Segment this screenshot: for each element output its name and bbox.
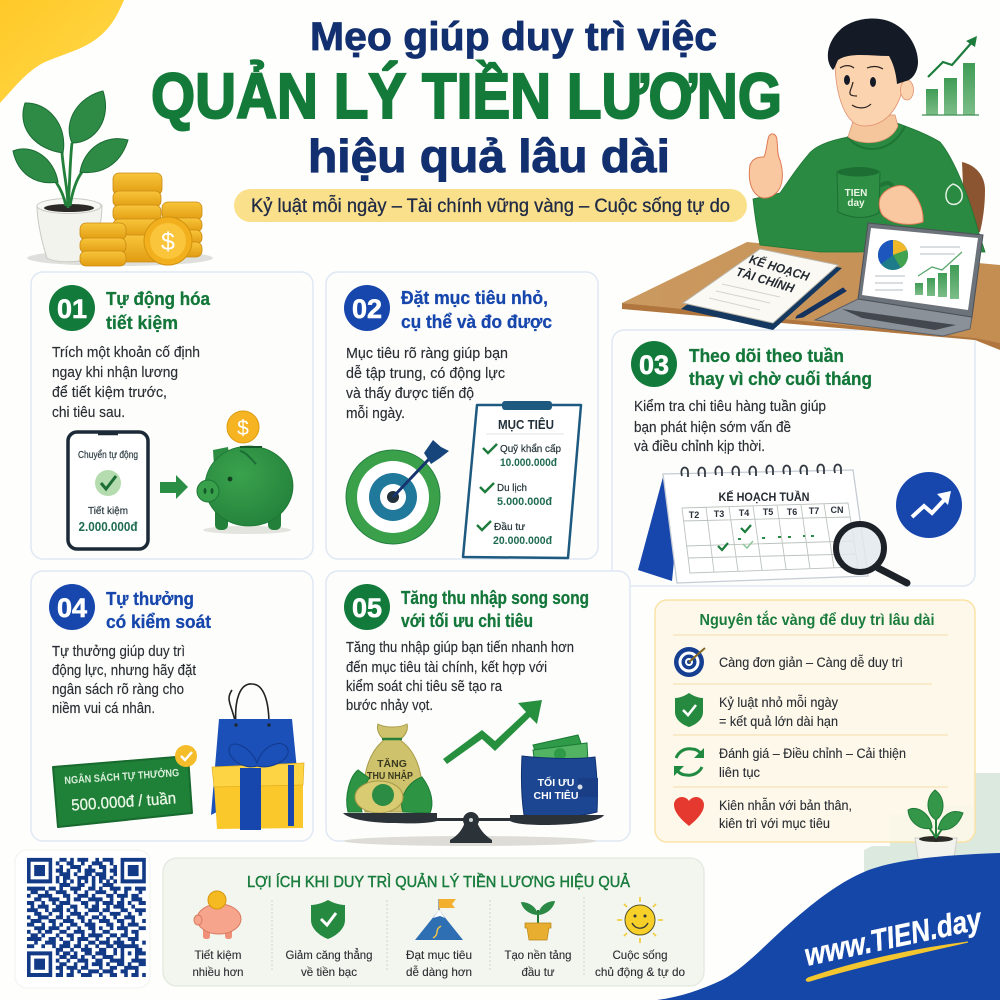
card 02 body: Mục tiêu rõ ràng giúp bạn [346,346,508,362]
badge number 02: 02 [352,294,382,324]
illustration: weekly calendar: T5 [763,507,773,517]
illustration: potted plant [13,91,213,266]
badge 03 [631,341,677,387]
badge number 01: 01 [57,294,87,324]
card 02 body [346,346,508,422]
illustration: piggy bank [197,411,293,534]
card 04 heading: có kiểm soát [106,611,211,632]
badge 05 [344,584,390,630]
card 04 body: Tự thưởng giúp duy trì [52,644,185,660]
brows and smile [840,66,883,108]
illustration: goal clipboard: 10.000.000đ [500,457,557,469]
card 05 body: Tăng thu nhập giúp bạn tiến nhanh hơn [346,640,574,656]
title line 3: hiệu quả lâu dài [308,130,670,182]
icon: pink piggy bank [194,891,241,939]
thumbs up hand [749,134,782,198]
card 03 heading: thay vì chờ cuối tháng [689,368,872,389]
illustration: weekly calendar: CN [830,505,844,515]
title line 1: Mẹo giúp duy trì việc [310,15,717,59]
illustration: balance scale [343,812,604,843]
rule 3 [719,746,906,780]
shadow under scale [344,836,596,846]
illustration: goal clipboard: Du lịch [497,482,527,494]
subtitle pill [234,189,747,222]
decorative city silhouette [864,773,1000,880]
neck [848,115,898,143]
illustration: coin stacks: $ [161,228,175,256]
card 05 body: đến mục tiêu tài chính, kết hợp với [346,660,547,676]
desk edge [622,303,1000,350]
illustration: income money bag: TĂNG [377,757,407,770]
illustration: small potted plant [908,790,963,870]
badge number 03: 03 [639,350,669,380]
mug: day [847,198,865,209]
illustration: weekly calendar: T7 [809,506,819,516]
card 05 heading: Tăng thu nhập song song [401,587,589,608]
rule 2 [719,695,838,729]
card 05 body: bước nhảy vọt. [346,698,433,714]
card 03 heading: Theo dõi theo tuần [689,345,844,366]
benefit 4 label [504,948,572,979]
desk [622,242,1000,343]
card 02 heading [401,287,552,332]
card 05 body [346,640,574,714]
card 02 heading: cụ thể và đo được [401,311,552,332]
benefit 1 [192,891,244,979]
benefit 1 label: Tiết kiệm [194,948,242,962]
illustration: income money bag [347,724,432,813]
rule 2: Kỷ luật nhỏ mỗi ngày [719,695,838,710]
benefit 3 label: dễ dàng hơn [406,964,472,979]
rule 4 [719,798,852,831]
badge number 04: 04 [57,593,87,623]
illustration: coin stacks [80,173,202,266]
mug: TIEN [845,188,867,199]
rule 3: liên tục [719,765,760,780]
card 01 body: Trích một khoản cố định [52,345,200,361]
panel: benefits [163,858,704,986]
illustration: magnifier [836,524,907,583]
illustration: wallet with cash [521,735,598,817]
card 02 [326,272,598,559]
sleeve emblem [946,184,962,204]
card 03 body: bạn phát hiện sớm vấn đề [634,420,791,436]
illustration: financial plan notebook [681,249,842,330]
benefit 4 label: Tạo nền tảng [504,948,572,962]
card 05 heading: với tối ưu chi tiêu [401,610,533,631]
pen [796,288,846,318]
illustration: gift box [212,744,304,830]
card 01 heading: Tự động hóa [106,288,211,309]
illustration: weekly calendar: KẾ HOẠCH TUẦN [718,489,810,504]
illustration: goal clipboard: Quỹ khẩn cấp [500,443,561,455]
illustration: wallet with cash: TỐI ƯU [538,775,574,789]
benefit 2 label [286,947,372,979]
benefits heading: LỢI ÍCH KHI DUY TRÌ QUẢN LÝ TIỀN LƯƠNG HIỆU QUẢ [247,872,630,891]
icon: smiling sun [617,897,663,943]
collar [848,126,905,149]
illustration: goal clipboard: MỤC TIÊU [498,417,554,432]
card 02 body: và thấy được tiến độ [346,386,474,402]
illustration: shopping bag [211,684,297,815]
illustration: phone: Chuyển tự động [78,449,138,461]
blue corner swoosh [657,853,1000,1000]
title line 2: QUẢN LÝ TIỀN LƯƠNG [151,59,782,132]
rule 1: Càng đơn giản – Càng dễ duy trì [719,655,903,670]
head [835,45,904,126]
benefit 2 label: Giảm căng thẳng [286,947,372,962]
card 04 heading [106,588,211,632]
budget tag: 500.000đ / tuần [71,790,177,815]
card 01 body [52,345,200,421]
card 01 [31,272,313,559]
decorative yellow blob [0,0,124,103]
mug [837,168,892,217]
badge number 05: 05 [352,593,382,623]
rule 2: = kết quả lớn dài hạn [719,714,838,729]
illustration: wallet with cash: CHI TIÊU [534,789,578,802]
illustration: financial plan notebook: KẾ HOẠCH [747,251,812,284]
card 01 body: chi tiêu sau. [52,405,125,421]
panel: golden rules [655,600,975,842]
benefit 4 [504,901,572,979]
budget tag [53,745,197,827]
title [151,15,782,182]
icon: mountain with flag [415,899,463,940]
benefit 1 label: nhiều hơn [192,965,244,979]
card 01 body: ngay khi nhận lương [52,365,178,381]
illustration: weekly calendar: T6 [787,507,797,517]
benefit 3 [406,899,472,979]
yellow underline [806,942,968,981]
icon: target [674,647,705,677]
benefit 1 label [192,948,244,979]
badge 02 [344,285,390,331]
illustration: phone: 2.000.000đ [78,520,138,534]
icon: blue trend circle [896,472,962,538]
card 03 body: Kiểm tra chi tiêu hàng tuần giúp [634,399,826,415]
benefit 5 [595,897,685,979]
arrow: phone to piggy bank [160,475,188,499]
rule 3: Đánh giá – Điều chỉnh – Cải thiện [719,746,906,761]
hair [828,18,918,84]
icon: cycle arrows [674,748,704,776]
illustration: weekly calendar [638,464,868,583]
illustration: growth chart icon [922,36,979,115]
laptop bars [915,252,962,299]
card 02 body: dễ tập trung, có động lực [346,365,505,382]
icon: green shield [311,900,345,939]
badge 01 [49,285,95,331]
card 01 body: để tiết kiệm trước, [52,385,167,401]
illustration: piggy bank: $ [237,417,249,440]
benefit 5 label: chủ động & tự do [595,965,685,979]
benefit 4 label: đầu tư [522,965,554,979]
card 03 body: và điều chỉnh kịp thời. [634,439,765,455]
ear [900,80,914,100]
illustration: financial plan notebook: TÀI CHÍNH [734,264,797,296]
card 05 [326,571,630,846]
chair [962,162,985,232]
illustration: goal clipboard [463,401,581,558]
arrow: growth [443,700,542,764]
benefit 2 [286,900,372,979]
card 01 heading [106,288,211,333]
card 03 [612,330,975,586]
illustration: income money bag: THU NHẬP [367,769,413,782]
benefit 5 label: Cuộc sống [612,948,668,962]
QR code card [15,850,150,988]
illustration: laptop [815,223,983,336]
card 03 heading [689,345,872,389]
card 04 heading: Tự thưởng [106,588,194,609]
illustration: phone [68,432,148,549]
sweater [753,123,985,252]
QR code [27,860,146,975]
card 02 body: mỗi ngày. [346,405,405,422]
card 05 heading [401,587,589,631]
illustration: weekly calendar: T3 [714,509,724,519]
illustration: goal clipboard: 20.000.000đ [493,535,552,547]
card 04 body: niềm vui cá nhân. [52,701,155,717]
rule 4: kiên trì với mục tiêu [719,816,830,831]
golden rules heading: Nguyên tắc vàng để duy trì lâu dài [700,611,934,629]
eyes [844,75,876,87]
pie chart [878,240,908,270]
illustration: weekly calendar: T4 [739,508,749,518]
illustration: weekly calendar: T2 [689,510,699,520]
icon: shield [675,693,703,727]
benefit 3 label [406,948,472,979]
icon: heart [674,797,704,826]
rule 4: Kiên nhẫn với bản thân, [719,798,852,813]
card 04 body: động lực, nhưng hãy đặt [52,663,196,679]
card 03 body [634,399,826,455]
hand on mug [879,186,923,224]
illustration: man with mug at desk [749,18,985,252]
illustration: goal clipboard: 5.000.000đ [497,496,552,508]
illustration: goal clipboard: Đầu tư [494,521,525,533]
subtitle pill: Kỷ luật mỗi ngày – Tài chính vững vàng – Cuộc sống tự do [251,195,730,217]
illustration: phone: Tiết kiệm [88,505,128,517]
card 01 heading: tiết kiệm [106,312,178,333]
card 04 body: ngân sách rõ ràng cho [52,682,184,698]
budget tag: NGÂN SÁCH TỰ THƯỞNG [64,766,180,787]
card 04 body [52,644,196,717]
icon: seedling pot [521,901,555,940]
card 05 body: kiểm soát chi tiêu sẽ tạo ra [346,679,503,695]
benefit 5 label [595,948,685,979]
card 04 [31,571,313,841]
card 02 heading: Đặt mục tiêu nhỏ, [401,287,548,308]
benefit 2 label: về tiền bạc [301,965,357,979]
benefit 3 label: Đạt mục tiêu [406,948,472,962]
illustration: target with arrow [346,440,449,544]
badge 04 [49,584,95,630]
